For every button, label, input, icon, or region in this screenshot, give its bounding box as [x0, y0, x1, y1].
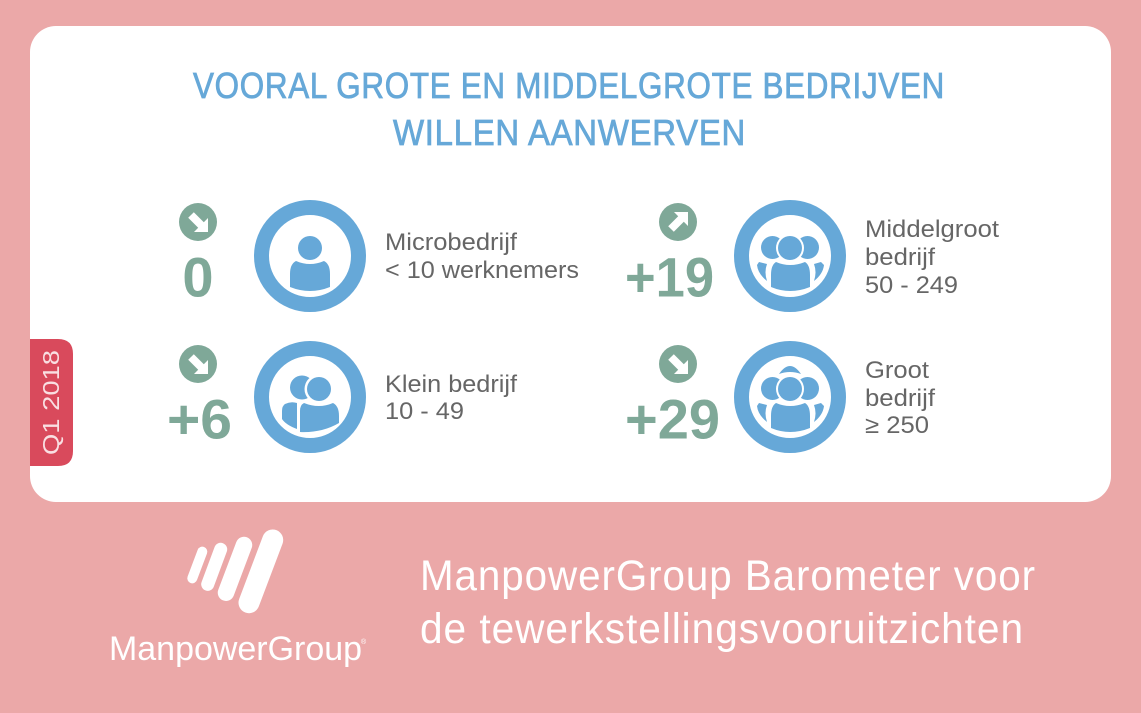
icon: group of people — [742, 208, 838, 304]
label: Middelgroot bedrijf: 50 - 249 — [865, 272, 958, 299]
icon: down arrow badge — [179, 203, 217, 241]
title — [193, 65, 945, 153]
label: Groot bedrijf: ≥ 250 — [865, 412, 929, 439]
label: Microbedrijf: < 10 werknemers — [385, 257, 579, 284]
title: WILLEN AANWERVEN — [393, 112, 746, 153]
icon: down arrow badge — [659, 345, 697, 383]
footer title: ManpowerGroup Barometer voor — [420, 552, 1036, 600]
icon: up arrow badge — [659, 203, 697, 241]
label: Groot bedrijf: Groot — [865, 357, 929, 384]
label: Microbedrijf — [385, 229, 579, 284]
label: Klein bedrijf: 10 - 49 — [385, 398, 464, 425]
label: Middelgroot bedrijf — [865, 216, 999, 299]
label: Microbedrijf: Microbedrijf — [385, 229, 517, 256]
icon: single person — [262, 208, 358, 304]
number: +6: +6 — [167, 388, 232, 450]
icon: down arrow badge — [179, 345, 217, 383]
registered mark: ® — [361, 638, 367, 646]
number: 0: 0 — [182, 246, 214, 308]
label: Klein bedrijf: Klein bedrijf — [385, 371, 517, 398]
row item: Groot bedrijf — [625, 345, 935, 450]
panel: white card — [30, 26, 1111, 502]
tab: Q1 2018: Q1 2018 — [38, 350, 64, 455]
title: VOORAL GROTE EN MIDDELGROTE BEDRIJVEN — [193, 65, 945, 106]
number: +19: +19 — [625, 246, 714, 308]
logo mark: slanted bars — [192, 540, 273, 603]
row item: Middelgroot bedrijf — [625, 203, 999, 308]
tab: Q1 2018 — [30, 339, 73, 466]
label: Middelgroot bedrijf: Middelgroot — [865, 216, 999, 243]
icon: two people — [262, 348, 358, 446]
row item: Microbedrijf — [179, 203, 579, 308]
label: Groot bedrijf: bedrijf — [865, 385, 935, 412]
label: Groot bedrijf — [865, 357, 935, 439]
logo: ManpowerGroup — [109, 540, 367, 668]
number: +29: +29 — [625, 388, 720, 450]
row item: Klein bedrijf — [167, 345, 517, 450]
logo wordmark: ManpowerGroup — [109, 630, 362, 668]
label: Middelgroot bedrijf: bedrijf — [865, 244, 935, 271]
footer title — [420, 552, 1036, 653]
footer title: de tewerkstellingsvooruitzichten — [420, 605, 1024, 653]
icon: large group of people — [742, 348, 838, 446]
label: Klein bedrijf — [385, 371, 517, 425]
